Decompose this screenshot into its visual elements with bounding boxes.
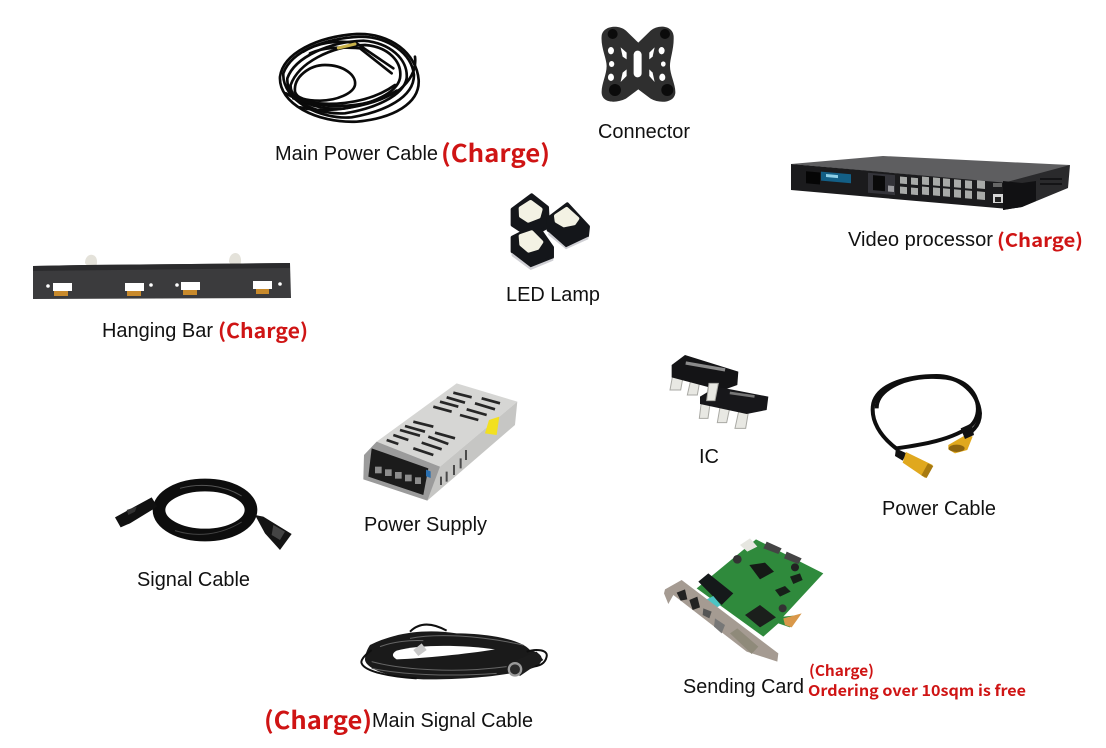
label: signal cable: Signal Cable — [137, 569, 250, 591]
label: sending card: (Charge) — [809, 660, 874, 681]
icon: power cable with yellow connectors — [873, 376, 980, 478]
icon: main power cable coil — [280, 34, 419, 122]
label: hanging bar — [102, 315, 308, 344]
label: connector: Connector — [598, 121, 690, 143]
label: main power cable: Main Power Cable — [275, 143, 438, 165]
icon: connector plate — [602, 27, 675, 102]
icon: video processor — [791, 156, 1070, 210]
label: sending card — [683, 660, 1026, 701]
label: main signal cable — [264, 701, 533, 736]
processor front panel — [791, 164, 1003, 209]
label: video processor — [848, 226, 1083, 253]
label: power cable: Power Cable — [882, 498, 996, 520]
label: video processor: Video processor — [848, 229, 993, 251]
icon: hanging bar — [33, 253, 291, 299]
icon: power supply — [363, 383, 517, 501]
icon: IC chips — [670, 355, 768, 428]
label: hanging bar: (Charge) — [218, 315, 308, 344]
label: sending card: Sending Card — [683, 676, 804, 698]
label: sending card: Ordering over 10sqm is free — [808, 680, 1026, 701]
icon: LED lamps — [512, 195, 588, 270]
label: power supply: Power Supply — [364, 514, 487, 536]
label: video processor: (Charge) — [997, 226, 1083, 253]
label: main power cable — [275, 134, 550, 169]
label: IC: IC — [699, 446, 719, 468]
label: LED lamp: LED Lamp — [506, 284, 600, 306]
icon: main signal cable coil — [361, 625, 547, 679]
label: main signal cable: (Charge) — [264, 701, 372, 736]
label: main signal cable: Main Signal Cable — [372, 710, 533, 732]
icon: sending card PCB — [664, 538, 823, 662]
label: hanging bar: Hanging Bar — [102, 320, 213, 342]
label: main power cable: (Charge) — [441, 134, 550, 169]
icon: signal cable — [115, 485, 292, 550]
